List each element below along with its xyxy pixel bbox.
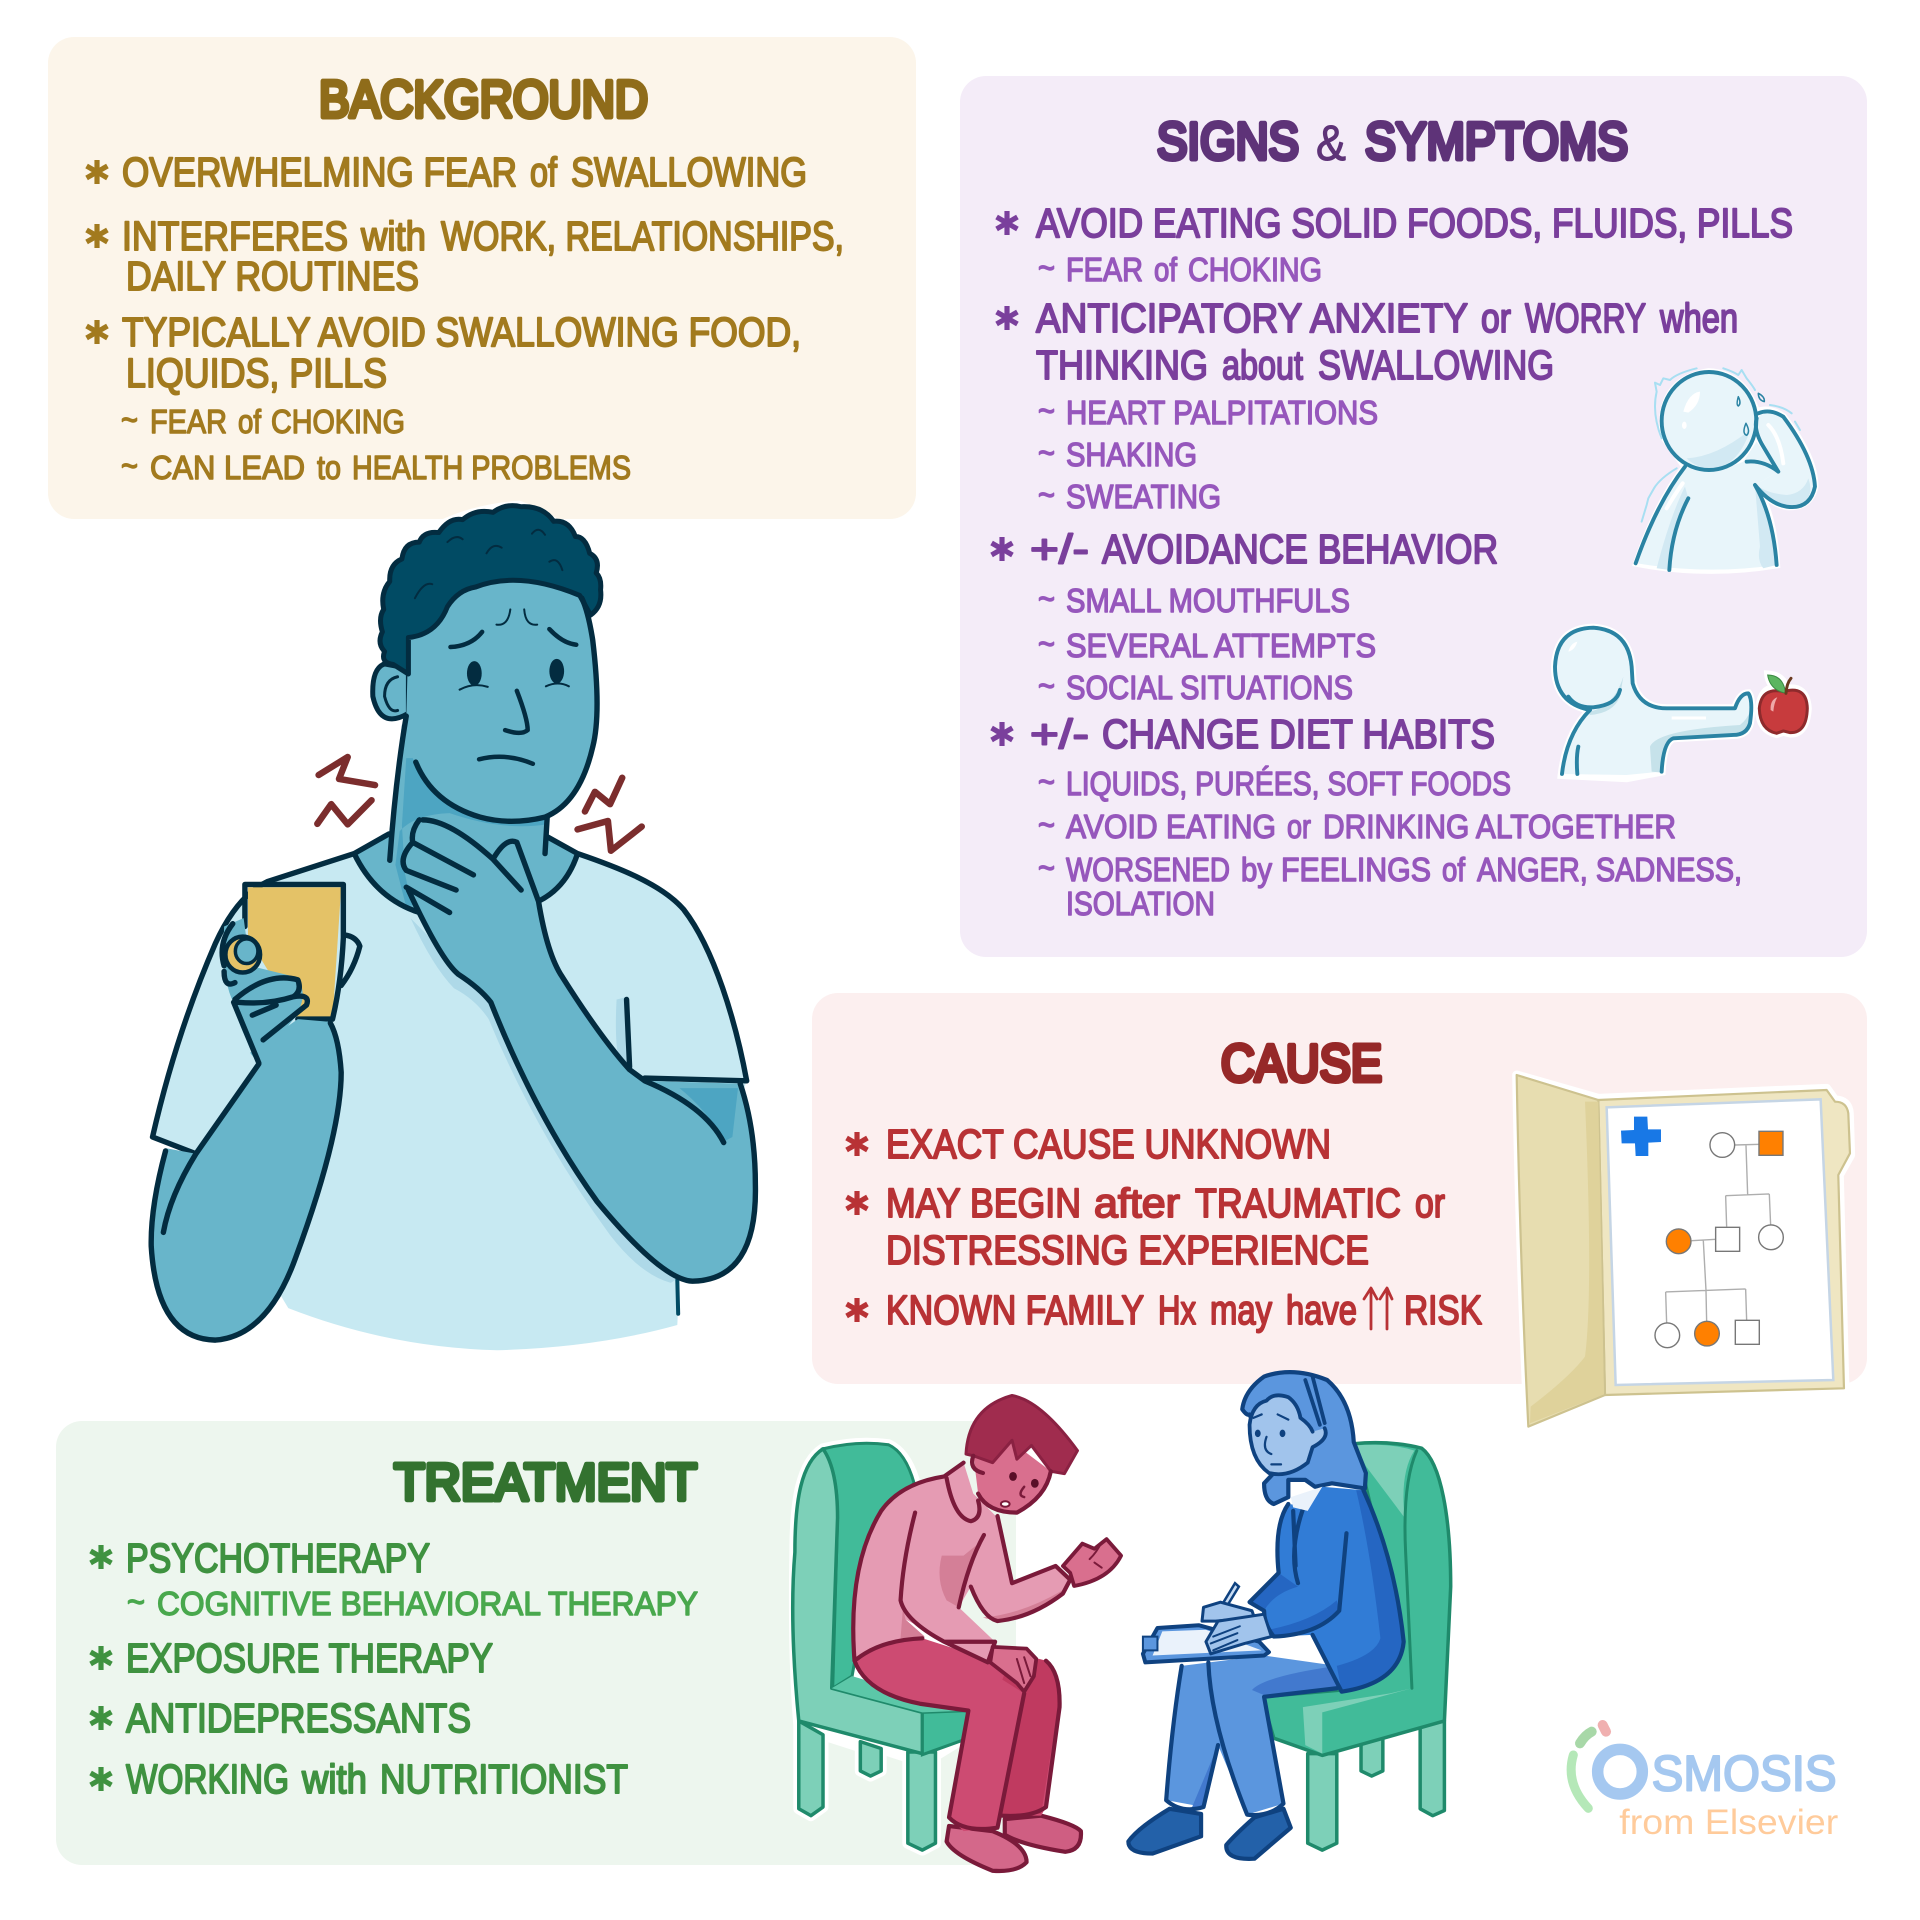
neck xyxy=(354,724,578,912)
bullet: anticipatory anxiety: about xyxy=(1222,342,1303,388)
sub-bullet: health problems: to xyxy=(317,449,341,486)
bullet: anticipatory anxiety: ✱ xyxy=(993,299,1021,338)
bullet: avoid eating: ✱ xyxy=(993,204,1021,243)
pen xyxy=(1220,1583,1239,1607)
sub-bullets: avoidance: SEVERAL ATTEMPTS xyxy=(1066,627,1376,664)
patient hands xyxy=(1063,1539,1121,1586)
bullet: working with nutritionist: WORKING xyxy=(126,1756,289,1802)
sub-bullet: health problems: ~ xyxy=(121,447,138,484)
sub-bullet: health problems: HEALTH PROBLEMS xyxy=(352,449,631,486)
bullet: psychotherapy: PSYCHOTHERAPY xyxy=(126,1535,430,1581)
bullet: anticipatory anxiety: when xyxy=(1659,295,1738,341)
collar and shirt outline xyxy=(153,834,747,1154)
sub-bullets: physical symptoms: ~ xyxy=(1038,392,1055,429)
pain marks xyxy=(317,757,642,851)
bullet: change diet habits: ✱ xyxy=(988,715,1016,754)
bullet: interferes: WORK, RELATIONSHIPS, xyxy=(441,213,844,259)
bullet: change diet habits: CHANGE DIET HABITS xyxy=(1102,711,1495,757)
bullet: working with nutritionist: NUTRITIONIST xyxy=(380,1756,628,1802)
patient face xyxy=(973,1442,1051,1513)
bullet: anticipatory anxiety: SWALLOWING xyxy=(1318,342,1554,388)
left arm xyxy=(150,1019,341,1340)
bullet: family history: ✱ xyxy=(843,1291,871,1330)
sub-bullets: diet: WORSENED xyxy=(1066,851,1230,888)
icon: apple xyxy=(1758,674,1808,735)
bullet: traumatic experience: MAY BEGIN xyxy=(886,1180,1081,1226)
face xyxy=(406,576,598,823)
sub-bullets: diet: LIQUIDS, PURÉES, SOFT FOODS xyxy=(1066,765,1511,802)
right chair xyxy=(1262,1443,1451,1850)
therapist xyxy=(1128,1372,1404,1859)
bullet: antidepressants: ANTIDEPRESSANTS xyxy=(126,1695,471,1741)
sub-bullets: diet: ~ xyxy=(1038,849,1055,886)
bullet: family history: Hx xyxy=(1158,1287,1196,1333)
bullet: exact cause unknown: ✱ xyxy=(843,1125,871,1164)
therapist collar xyxy=(1291,1487,1322,1511)
sub-bullets: diet: by xyxy=(1241,851,1272,888)
left chair xyxy=(793,1443,968,1850)
bullet: avoidance behavior: AVOIDANCE BEHAVIOR xyxy=(1102,526,1498,572)
sub-bullets: diet: DRINKING ALTOGETHER xyxy=(1323,808,1676,845)
bullet: typically avoid: LIQUIDS, PILLS xyxy=(126,350,387,396)
bullet: interferes: DAILY ROUTINES xyxy=(126,253,419,299)
heading: signs and symptoms: SIGNS xyxy=(1157,113,1299,171)
bullet: change diet habits: +/- xyxy=(1030,711,1089,757)
bullet: exact cause unknown: EXACT CAUSE UNKNOWN xyxy=(886,1121,1331,1167)
patient sweater xyxy=(853,1463,1070,1662)
sub-bullets: physical symptoms: ~ xyxy=(1038,434,1055,471)
bullet: exposure therapy: EXPOSURE THERAPY xyxy=(126,1635,493,1681)
sub-bullets: avoidance: SOCIAL SITUATIONS xyxy=(1066,669,1353,706)
clipboard xyxy=(1143,1625,1269,1662)
sub-bullet: fear of choking: ~ xyxy=(121,401,138,438)
bullet: avoidance behavior xyxy=(988,526,1498,572)
sub-bullet: cognitive behavioral therapy: ~ xyxy=(127,1583,145,1620)
bullet: antidepressants: ✱ xyxy=(87,1699,115,1738)
sub-bullets: diet: ISOLATION xyxy=(1066,885,1215,922)
sub-bullet: fear of choking xyxy=(1038,249,1322,288)
heading: cause: CAUSE xyxy=(1221,1035,1382,1093)
bullet: traumatic experience: after xyxy=(1094,1180,1180,1226)
panel: background xyxy=(48,37,916,519)
logo arcs xyxy=(1571,1725,1606,1808)
logo: Osmosis from Elsevier: from Elsevier xyxy=(1619,1803,1839,1842)
sub-bullet: fear of choking: CHOKING xyxy=(271,403,405,440)
bullet: working with nutritionist xyxy=(87,1756,628,1802)
sub-bullet: fear of choking: ~ xyxy=(1038,249,1055,286)
hair xyxy=(380,506,601,674)
sub-bullets: physical symptoms xyxy=(1038,392,1378,515)
therapist shoes xyxy=(1128,1809,1201,1854)
bullet: family history xyxy=(843,1287,1482,1333)
bullet: family history: have xyxy=(1286,1287,1357,1333)
icon: anxious sweating figure xyxy=(1636,368,1815,570)
bullet: anticipatory anxiety: THINKING xyxy=(1036,342,1208,388)
sub-bullet: fear of choking xyxy=(121,401,405,440)
bullet: traumatic experience xyxy=(843,1180,1445,1273)
bullet: interferes: INTERFERES xyxy=(122,213,348,259)
right arm xyxy=(402,820,755,1281)
bullet: interferes xyxy=(83,213,844,299)
bullet: family history: RISK xyxy=(1404,1287,1482,1333)
sub-bullets: physical symptoms: ~ xyxy=(1038,476,1055,513)
bullet: anticipatory anxiety: or xyxy=(1481,295,1511,341)
panel: signs and symptoms xyxy=(960,76,1867,957)
bullet: traumatic experience: TRAUMATIC xyxy=(1195,1180,1401,1226)
therapist jacket xyxy=(1250,1487,1404,1692)
illustration: therapy session xyxy=(793,1372,1451,1871)
bullet: overwhelming fear: SWALLOWING xyxy=(571,149,807,195)
hand on mug xyxy=(224,918,303,1061)
bullet: family history: may xyxy=(1210,1287,1272,1333)
bullet: anticipatory anxiety: WORRY xyxy=(1525,295,1646,341)
sub-bullets: avoidance: ~ xyxy=(1038,580,1055,617)
sub-bullets: avoidance: SMALL MOUTHFULS xyxy=(1066,582,1350,619)
logo: Osmosis from Elsevier: SMOSIS xyxy=(1652,1745,1837,1801)
icon: medical folder with pedigree xyxy=(1517,1075,1851,1428)
sub-bullet: health problems xyxy=(121,447,631,486)
sub-bullet: health problems: CAN LEAD xyxy=(150,449,305,486)
sub-bullets: avoidance: ~ xyxy=(1038,667,1055,704)
sub-bullet: fear of choking: FEAR xyxy=(150,403,227,440)
pedigree chart xyxy=(1655,1131,1783,1348)
hair halo xyxy=(380,507,602,668)
bullet: anticipatory anxiety xyxy=(993,295,1738,388)
therapist hands xyxy=(1202,1602,1254,1621)
bullet: traumatic experience: ✱ xyxy=(843,1184,871,1223)
bullet: overwhelming fear: of xyxy=(530,149,557,195)
bullet: psychotherapy: ✱ xyxy=(87,1538,115,1577)
sub-bullets: diet: or xyxy=(1287,808,1311,845)
sub-bullets: physical symptoms: SHAKING xyxy=(1066,436,1197,473)
ear xyxy=(373,664,408,719)
bullet: exposure therapy: ✱ xyxy=(87,1639,115,1678)
panel: cause xyxy=(812,993,1867,1384)
patient shoes xyxy=(1005,1816,1081,1852)
bullet: working with nutritionist: with xyxy=(301,1756,367,1802)
bullet: avoidance behavior: +/- xyxy=(1030,526,1089,572)
bullet: interferes: ✱ xyxy=(83,217,111,256)
therapist face xyxy=(1250,1395,1326,1474)
bullet: typically avoid xyxy=(83,309,801,396)
bullet: working with nutritionist: ✱ xyxy=(87,1760,115,1799)
sub-bullet: fear of choking: of xyxy=(1154,251,1178,288)
heading: signs and symptoms: & xyxy=(1316,115,1346,171)
sub-bullets: avoidance xyxy=(1038,580,1376,706)
patient xyxy=(853,1395,1121,1871)
sub-bullet: fear of choking: of xyxy=(238,403,262,440)
icon: figure pushing away apple xyxy=(1555,628,1751,778)
sub-bullets: diet xyxy=(1038,763,1742,922)
heading: background: BACKGROUND xyxy=(319,71,648,129)
sub-bullets: physical symptoms: SWEATING xyxy=(1066,478,1221,515)
bullet: overwhelming fear: OVERWHELMING FEAR xyxy=(122,149,517,195)
therapist hair back xyxy=(1242,1372,1366,1504)
bullet: overwhelming fear xyxy=(83,149,807,195)
bullet: family history: KNOWN FAMILY xyxy=(886,1287,1144,1333)
bullet: avoidance behavior: ✱ xyxy=(988,530,1016,569)
heading: signs and symptoms: SYMPTOMS xyxy=(1365,113,1628,171)
bullet: avoid eating: AVOID EATING SOLID FOODS, FLUIDS, PILLS xyxy=(1036,200,1793,246)
illustration: anxious man with mug holding throat xyxy=(150,506,755,1350)
logo: Osmosis from Elsevier xyxy=(1571,1725,1839,1842)
sub-bullet: fear of choking: CHOKING xyxy=(1188,251,1322,288)
heading: signs and symptoms xyxy=(1157,113,1628,171)
bullet: typically avoid: TYPICALLY AVOID SWALLOWING FOOD, xyxy=(122,309,801,355)
sub-bullet: fear of choking: FEAR xyxy=(1066,251,1143,288)
sub-bullet: cognitive behavioral therapy: COGNITIVE BEHAVIORAL THERAPY xyxy=(157,1585,698,1622)
heading: treatment: TREATMENT xyxy=(394,1454,697,1512)
bullet: overwhelming fear: ✱ xyxy=(83,153,111,192)
sub-bullets: diet: ~ xyxy=(1038,806,1055,843)
sub-bullets: physical symptoms: HEART PALPITATIONS xyxy=(1066,394,1378,431)
bullet: traumatic experience: or xyxy=(1415,1180,1445,1226)
sub-bullets: diet: of xyxy=(1442,851,1466,888)
sub-bullets: diet: AVOID EATING xyxy=(1066,808,1276,845)
bullet: anticipatory anxiety: ANTICIPATORY ANXIETY xyxy=(1036,295,1468,341)
bullet: interferes: with xyxy=(360,213,426,259)
bullet: typically avoid: ✱ xyxy=(83,313,111,352)
bullet: traumatic experience: DISTRESSING EXPERIENCE xyxy=(886,1227,1369,1273)
patient hair xyxy=(966,1395,1077,1474)
sub-bullets: avoidance: ~ xyxy=(1038,625,1055,662)
sub-bullets: diet: ~ xyxy=(1038,763,1055,800)
mug xyxy=(248,887,341,1019)
shirt xyxy=(153,834,747,1350)
therapist trousers xyxy=(1166,1656,1337,1815)
patient trousers xyxy=(855,1638,1060,1831)
sub-bullets: diet: ANGER, SADNESS, xyxy=(1477,851,1742,888)
sub-bullets: diet: FEELINGS xyxy=(1281,851,1431,888)
face lines xyxy=(385,598,597,860)
panel: treatment xyxy=(56,1421,1016,1865)
icon: medical cross xyxy=(1621,1117,1661,1156)
